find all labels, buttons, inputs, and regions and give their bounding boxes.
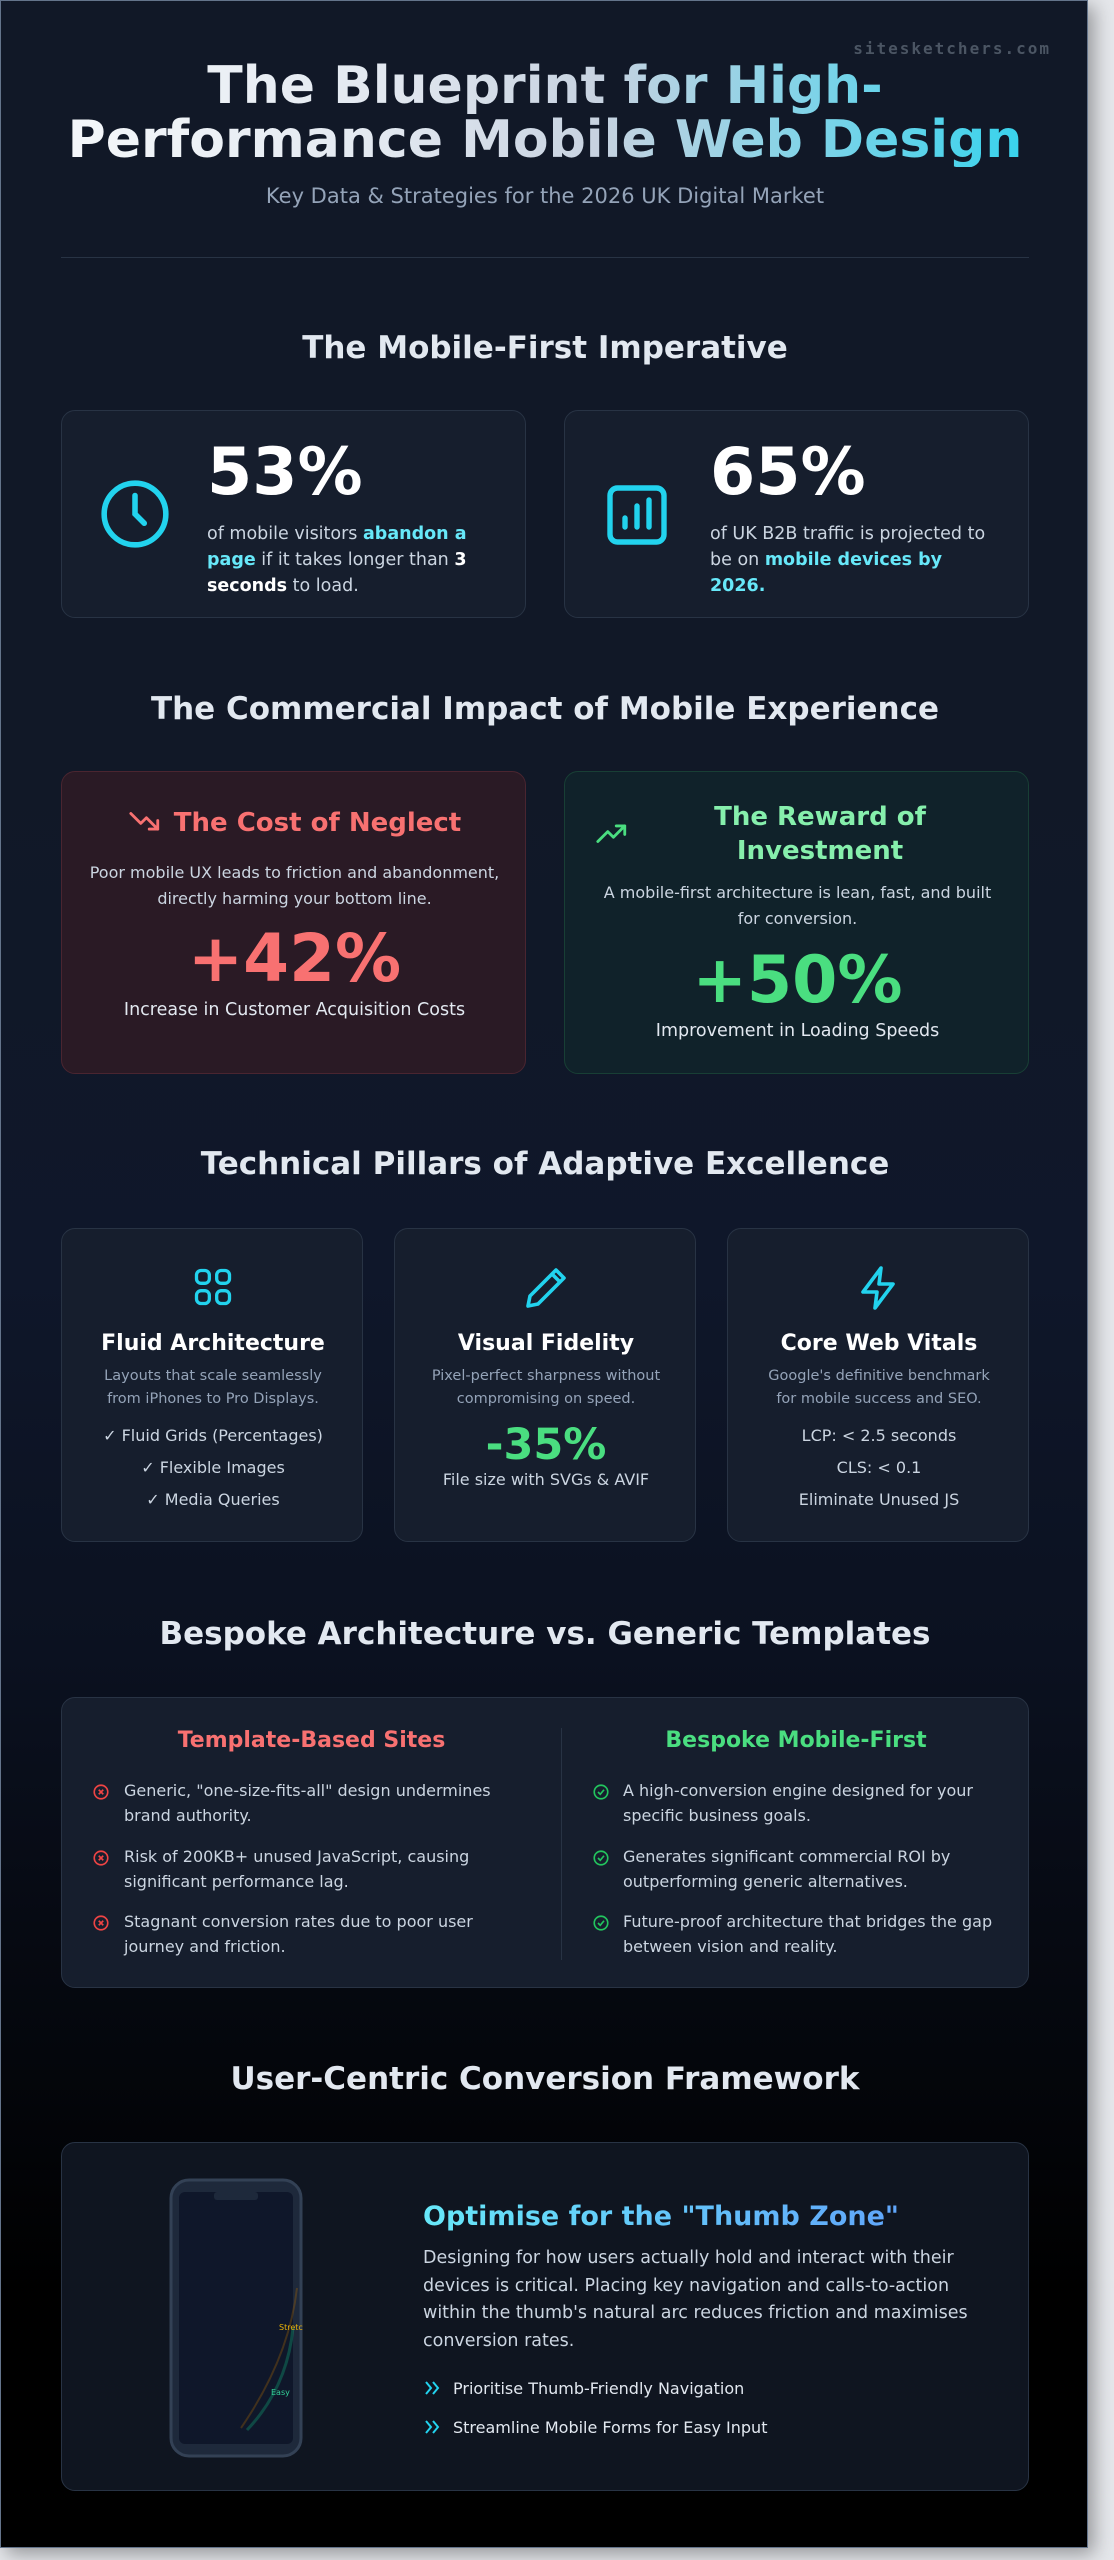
panel: fluid architecture: Fluid Architecture bbox=[101, 1331, 325, 1356]
panel: cost of neglect: Increase in Customer Acquisition Costs bbox=[124, 1000, 465, 1020]
panel: visual fidelity: Pixel-perfect sharpness without compromising on speed. bbox=[432, 1368, 660, 1407]
panel: core web vitals: Eliminate Unused JS bbox=[799, 1490, 959, 1509]
stat text bbox=[207, 435, 467, 596]
panel: fluid architecture: ✓ Fluid Grids (Percentages) bbox=[103, 1426, 323, 1445]
panel: core web vitals: LCP: < 2.5 seconds bbox=[802, 1426, 956, 1445]
bullet list: Streamline Mobile Forms for Easy Input bbox=[453, 2418, 767, 2437]
item: Future-proof architecture that bridges the gap between vision and reality. bbox=[623, 1912, 992, 1956]
heading: Investment bbox=[737, 836, 903, 866]
heading: Optimise for the "Thumb Zone" bbox=[423, 2201, 899, 2232]
bullet list bbox=[425, 2379, 768, 2437]
panel: stat 65% bbox=[564, 410, 1029, 618]
heading: bespoke vs templates: Bespoke Architecture vs. Generic Templates bbox=[159, 1616, 931, 1652]
stat text bbox=[710, 435, 985, 596]
panel: core web vitals: Google's definitive benchmark for mobile success and SEO. bbox=[768, 1368, 990, 1407]
heading: conversion framework: User-Centric Conversion Framework bbox=[230, 2061, 860, 2097]
heading: The Reward of bbox=[714, 802, 926, 832]
icon: pencil bbox=[526, 1268, 566, 1308]
panel: reward of investment bbox=[564, 771, 1029, 1074]
item: Risk of 200KB+ unused JavaScript, causing significant performance lag. bbox=[124, 1847, 469, 1891]
item: Stagnant conversion rates due to poor user journey and friction. bbox=[124, 1912, 473, 1956]
stat text: 53% bbox=[207, 435, 363, 510]
stat -35%: -35% bbox=[486, 1420, 606, 1470]
column: template-based bbox=[93, 1728, 491, 1956]
heading with icon: The Cost of Neglect bbox=[174, 808, 461, 838]
column: template-based: Template-Based Sites bbox=[178, 1728, 445, 1753]
illustration: phone: Easy bbox=[271, 2388, 290, 2397]
subtitle: Key Data & Strategies for the 2026 UK Digital Market bbox=[266, 184, 824, 208]
stat text: of mobile visitors abandon a page if it takes longer than 3 seconds to load. bbox=[207, 524, 467, 596]
heading: commercial impact: The Commercial Impact of Mobile Experience bbox=[151, 691, 939, 727]
watermark: sitesketchers.com bbox=[853, 39, 1051, 58]
illustration: phone bbox=[170, 2178, 303, 2458]
panel: core web vitals: Core Web Vitals bbox=[781, 1331, 977, 1356]
icon: trending up bbox=[596, 824, 626, 843]
panel: core web vitals: CLS: < 0.1 bbox=[837, 1458, 921, 1477]
title: The Blueprint for High- bbox=[207, 56, 883, 116]
heading: mobile-first: The Mobile-First Imperative bbox=[302, 330, 788, 366]
stat text: 65% bbox=[710, 435, 866, 510]
panel: visual fidelity: File size with SVGs & AVIF bbox=[443, 1470, 649, 1489]
heading: technical pillars: Technical Pillars of Adaptive Excellence bbox=[201, 1146, 889, 1182]
panel: stat 53% bbox=[61, 410, 526, 618]
stat +42%: +42% bbox=[188, 920, 401, 997]
panel: fluid architecture: ✓ Media Queries bbox=[146, 1490, 280, 1509]
panel: cost of neglect: Poor mobile UX leads to friction and abandonment, directly harming your bottom line. bbox=[90, 863, 499, 908]
panel: core web vitals bbox=[727, 1228, 1029, 1542]
panel: visual fidelity: Visual Fidelity bbox=[458, 1331, 634, 1356]
title: Performance Mobile Web Design bbox=[68, 110, 1022, 170]
column: bespoke: Bespoke Mobile-First bbox=[665, 1728, 927, 1753]
paragraph: Designing for how users actually hold and interact with their devices is critical. Placing key navigation and calls-to-action within the thumb's natural arc reduces friction and maximises conversion rates. bbox=[423, 2248, 968, 2350]
stat +50%: +50% bbox=[692, 943, 903, 1018]
panel: comparison bbox=[61, 1697, 1029, 1988]
panel: fluid architecture: Layouts that scale seamlessly from iPhones to Pro Displays. bbox=[104, 1368, 322, 1407]
item: Generic, "one-size-fits-all" design undermines brand authority. bbox=[124, 1781, 491, 1825]
icon: clock bbox=[101, 480, 169, 548]
panel: fluid architecture bbox=[61, 1228, 363, 1542]
icon: bolt bbox=[861, 1266, 895, 1310]
panel: reward of investment: Improvement in Loading Speeds bbox=[656, 1021, 939, 1041]
item: Generates significant commercial ROI by outperforming generic alternatives. bbox=[623, 1847, 950, 1891]
panel: cost of neglect bbox=[61, 771, 526, 1074]
icon: chart bbox=[607, 485, 667, 545]
panel: visual fidelity bbox=[394, 1228, 696, 1542]
icon: grid bbox=[194, 1268, 232, 1306]
title bbox=[1, 59, 1089, 167]
stat text: of UK B2B traffic is projected to be on mobile devices by 2026. bbox=[710, 524, 985, 596]
heading bbox=[714, 802, 926, 866]
item: A high-conversion engine designed for your specific business goals. bbox=[623, 1781, 973, 1825]
panel: reward of investment: A mobile-first architecture is lean, fast, and built for conversion. bbox=[604, 883, 991, 928]
panel: thumb zone bbox=[61, 2142, 1029, 2491]
bullet list: Prioritise Thumb-Friendly Navigation bbox=[453, 2379, 744, 2398]
panel: fluid architecture: ✓ Flexible Images bbox=[141, 1458, 285, 1477]
column: bespoke bbox=[593, 1728, 992, 1956]
